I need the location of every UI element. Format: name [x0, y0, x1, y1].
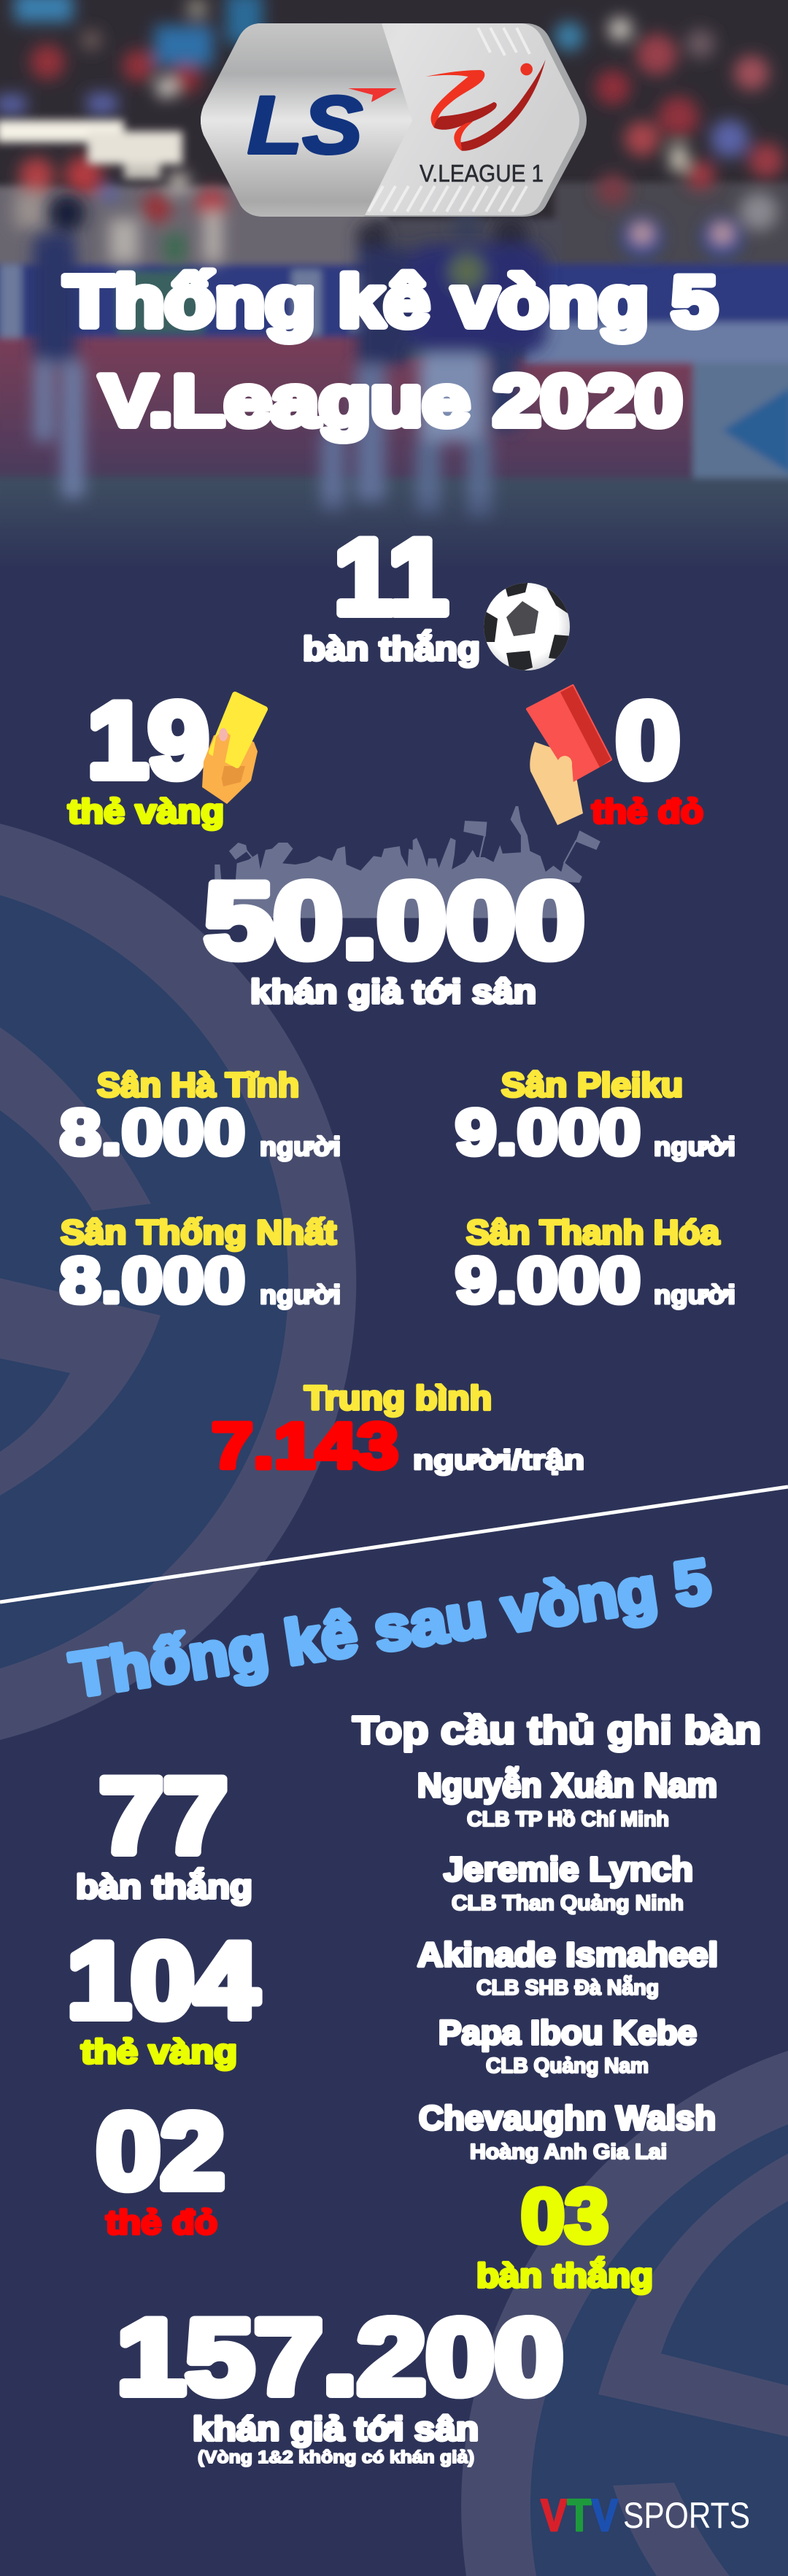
label: goals: bàn thắng: [303, 630, 480, 668]
scorer 4: Papa Ibou Kebe: [439, 2014, 697, 2051]
stat: 77 goals: 77: [99, 1756, 228, 1875]
scorer 1: [417, 1766, 717, 1831]
stadium: Pleiku: người: [654, 1132, 735, 1161]
scorer 5: Hoàng Anh Gia Lai: [470, 2140, 667, 2164]
watermark: league emblem bottom-left of upper section: [0, 824, 356, 1740]
scorer 2: [444, 1850, 693, 1915]
stat: 50.000 spectators: 50.000: [204, 861, 584, 980]
stadium: Hà Tĩnh: người: [260, 1132, 341, 1161]
scorer 5: Chevaughn Walsh: [419, 2099, 716, 2137]
icon: hand holding yellow card: [202, 695, 265, 804]
stadium: Hà Tĩnh: [60, 1066, 341, 1168]
icon: football: [484, 583, 570, 670]
logo: LS V.League 1 badge: [201, 23, 587, 217]
label: spectators season: khán giả tới sân: [193, 2410, 479, 2448]
scorer 3: CLB SHB Đà Nẵng: [476, 1975, 659, 2000]
LS wordmark: LS: [247, 80, 363, 171]
logo: VTV Sports: [541, 2491, 750, 2541]
logo: VTV Sports: VTV: [541, 2491, 618, 2541]
stadium: Thanh Hóa: [455, 1213, 735, 1316]
stadium: Thống Nhất: [60, 1213, 341, 1316]
players: [33, 195, 547, 518]
stat: 0 red cards: 0: [616, 681, 680, 800]
stadium: Pleiku: Sân Pleiku: [501, 1066, 683, 1104]
label: goals yellow: bàn thắng: [476, 2256, 653, 2294]
title line 1: Thống kê vòng 5: [64, 261, 717, 341]
stadium: Pleiku: [455, 1066, 735, 1168]
heading: after round 5 stats: Thống kê sau vòng 5: [66, 1546, 715, 1711]
icon: cheering crowd silhouette: [215, 806, 600, 918]
stat: 157.200 spectators: 157.200: [117, 2297, 563, 2416]
crowd lower tone: [0, 186, 387, 266]
scorer 4: [439, 2014, 697, 2078]
label: spectators: khán giả tới sân: [250, 972, 536, 1010]
stadium: Thanh Hóa: người: [654, 1280, 735, 1310]
crowd colour spots: [15, 0, 73, 22]
label: average: Trung bình: [304, 1379, 492, 1417]
scorer 2: Jeremie Lynch: [444, 1850, 693, 1888]
label: per match: người/trận: [413, 1445, 584, 1476]
LS red arrow: [348, 88, 397, 102]
stadium: Pleiku: 9.000: [455, 1096, 641, 1168]
boards: [0, 264, 788, 337]
stat: average attendance: 7.143: [212, 1409, 398, 1482]
note: rounds without spectators: (Vòng 1&2 không có khán giả): [198, 2448, 474, 2467]
stadium: Thống Nhất: người: [260, 1280, 341, 1310]
label: red cards season: thẻ đỏ: [106, 2203, 217, 2241]
stat: 19 yellow cards: 19: [88, 681, 209, 800]
stat: 11 goals: 11: [334, 517, 448, 636]
heading: top scorers: Top cầu thủ ghi bàn: [352, 1709, 761, 1752]
stat: 104 yellow cards: 104: [67, 1921, 258, 2040]
background photo: blurred stadium crowd and players: [0, 0, 788, 541]
logo: VTV Sports: SPORTS: [623, 2495, 750, 2536]
stadium: Thống Nhất: Sân Thống Nhất: [61, 1213, 336, 1251]
stadium: Thanh Hóa: 9.000: [455, 1244, 641, 1316]
stat: 02 red cards: 02: [96, 2092, 225, 2211]
stadium: Thanh Hóa: Sân Thanh Hóa: [466, 1213, 719, 1251]
scorer 3: [417, 1935, 718, 2000]
scorer 4: CLB Quảng Nam: [486, 2054, 649, 2078]
label: goals season: bàn thắng: [76, 1868, 252, 1906]
V.LEAGUE 1 label: V.LEAGUE 1: [420, 160, 544, 187]
scorer 3: Akinade Ismaheel: [417, 1935, 718, 1973]
stadium: Hà Tĩnh: Sân Hà Tĩnh: [97, 1066, 299, 1104]
scorer 5: [419, 2099, 716, 2164]
scorer 2: CLB Than Quảng Ninh: [452, 1892, 684, 1915]
title line 2: V.League 2020: [100, 360, 682, 441]
label: yellow cards season: thẻ vàng: [81, 2032, 237, 2070]
scorer 1: CLB TP Hồ Chí Minh: [467, 1808, 669, 1831]
label: red cards: thẻ đỏ: [592, 792, 703, 830]
watermark: league emblem bottom-right: [461, 2051, 788, 2576]
stadium: Thống Nhất: 8.000: [60, 1244, 245, 1316]
bright banner: [0, 120, 182, 179]
fan crests: [622, 217, 663, 258]
stat: 03 goals: 03: [521, 2174, 609, 2259]
stadium: Hà Tĩnh: 8.000: [60, 1096, 245, 1168]
label: yellow cards: thẻ vàng: [68, 792, 224, 830]
scorer 1: Nguyễn Xuân Nam: [417, 1766, 717, 1804]
icon: hand holding red card: [528, 686, 611, 825]
V.League ribbon mark: [425, 60, 546, 151]
